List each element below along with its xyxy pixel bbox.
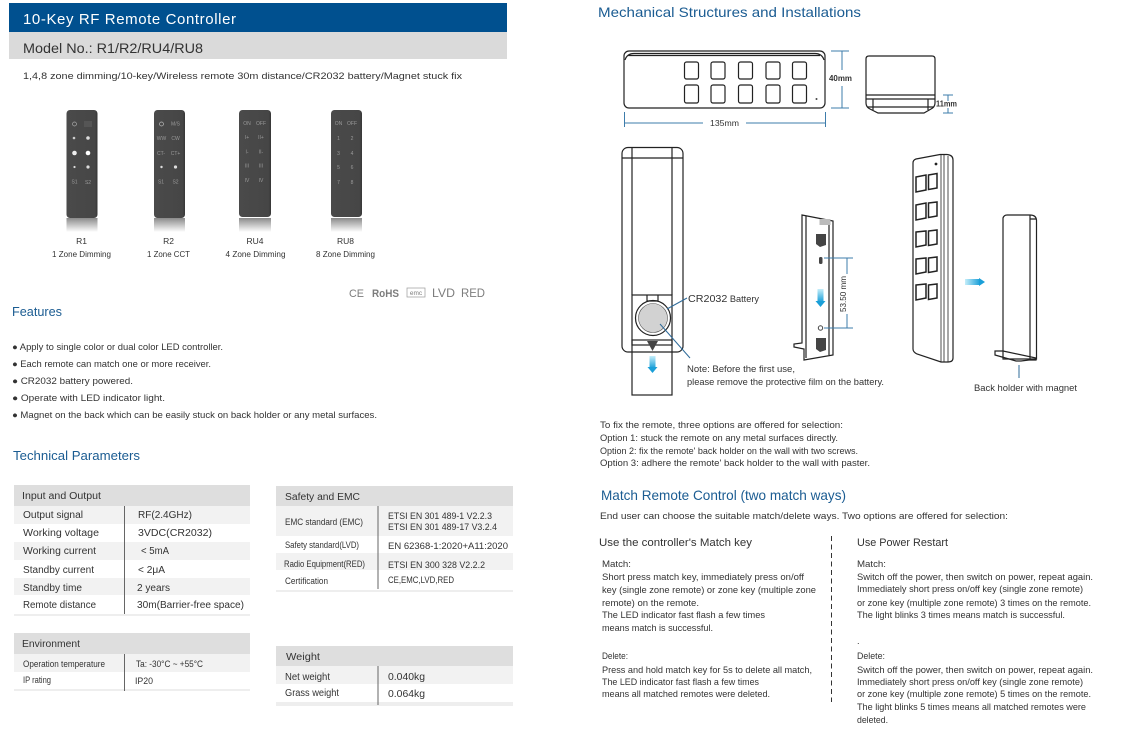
diagram: back holder with magnet: Back holder with magnet [974, 383, 1077, 393]
product: RU8 remote: 1 [337, 136, 340, 142]
table: Input and Output: 30m(Barrier-free space) [137, 600, 244, 611]
product: R2 remote: CW [171, 136, 180, 142]
product: RU4 remote: III [259, 164, 263, 170]
product: RU8 remote: ON [335, 121, 343, 127]
callout: protective film note [660, 324, 884, 387]
table: Safety and EMC: ETSI EN 301 489-17 V3.2.4 [388, 522, 497, 532]
table: Safety and EMC: EMC standard (EMC) [285, 517, 363, 527]
label: RU8: 8 Zone Dimming [316, 249, 375, 259]
product: RU4 remote: III [245, 164, 249, 170]
certification marks: emc [410, 290, 423, 297]
column: controller's match key: means match is successful. [602, 623, 713, 633]
label: R1: 1 Zone Dimming [52, 249, 111, 259]
column: power restart: Use Power Restart [857, 537, 948, 549]
label: RU4: 4 Zone Dimming [226, 249, 286, 259]
product: R2 remote: S1 [158, 180, 164, 186]
column: power restart: Delete: [857, 651, 885, 661]
product: R1 remote: S1 [71, 180, 78, 186]
heading: Features: Features [12, 304, 62, 319]
column: power restart: deleted. [857, 715, 888, 725]
product: RU8 remote: 4 [351, 151, 354, 157]
match intro: End user can choose the suitable match/delete ways. Two options are offered for selection: [600, 511, 1008, 521]
diagram: front view with dimensions [624, 51, 852, 128]
product: RU8 remote: 2 [351, 136, 354, 142]
certification marks: RED [461, 288, 485, 300]
table: Safety and EMC: Safety standard(LVD) [285, 540, 359, 550]
table: Safety and EMC: ETSI EN 300 328 V2.2.2 [388, 560, 485, 570]
label: R2: 1 Zone CCT [147, 249, 190, 259]
product: RU4 remote: OFF [256, 121, 266, 127]
table: Input and Output: Working current [23, 546, 96, 557]
heading: Match Remote Control: Match Remote Control (two match ways) [601, 487, 846, 503]
product: R1 remote [66, 110, 98, 232]
callout: CR2032 battery: CR2032 Battery [688, 293, 760, 305]
features list: ● Magnet on the back which can be easily stuck on back holder or any metal surfaces. [12, 410, 377, 420]
column: controller's match key: Press and hold match key for 5s to delete all match, [602, 665, 812, 675]
table: Input and Output: < 2μA [138, 565, 165, 576]
product: R2 remote [154, 110, 185, 232]
column: controller's match key: Use the controller's Match key [599, 537, 753, 549]
table: Input and Output: Standby time [23, 583, 82, 594]
table: Environment: Ta: -30°C ~ +55°C [136, 659, 203, 669]
diagram: remote in perspective [913, 154, 953, 362]
product: RU8 remote [331, 110, 362, 232]
table: Environment: Operation temperature [23, 659, 105, 669]
column: controller's match key: Match: [602, 559, 631, 569]
product: RU8 remote: 5 [337, 165, 340, 171]
product: RU4 remote: I+ [245, 135, 249, 141]
diagram: front view with dimensions: 40mm [829, 73, 852, 83]
table: Input and Output: Remote distance [23, 600, 96, 611]
table: Environment: Environment [22, 639, 80, 650]
diagram: back holder with screw spacing [794, 215, 853, 360]
callout: protective film note: please remove the protective film on the battery. [687, 377, 884, 387]
diagram: back holder with magnet [974, 215, 1077, 393]
table: Weight [276, 646, 513, 706]
diagram: battery compartment [622, 148, 683, 395]
table: Weight: 0.064kg [388, 689, 425, 700]
product: R1 remote: S2 [85, 180, 91, 186]
table: Safety and EMC [276, 486, 513, 592]
table: Safety and EMC: CE,EMC,LVD,RED [388, 575, 454, 585]
table: Weight: Grass weight [285, 688, 339, 699]
diagram: side view with dimensions: 11mm [936, 100, 957, 108]
table: Input and Output: 3VDC(CR2032) [138, 528, 212, 539]
table: Safety and EMC: Radio Equipment(RED) [284, 559, 365, 569]
table: Safety and EMC: ETSI EN 301 489-1 V2.2.3 [388, 511, 492, 521]
label: RU4: RU4 [246, 236, 264, 246]
table: Safety and EMC: EN 62368-1:2020+A11:2020 [388, 541, 508, 551]
product: RU4 remote: II- [259, 150, 264, 156]
model number bar: Model No.: R1/R2/RU4/RU8 [23, 40, 203, 56]
text block: fixing options: Option 3: adhere the remote' back holder to the wall with paster. [600, 458, 870, 468]
table: Input and Output: Input and Output [22, 491, 101, 502]
arrow: slide battery door down [648, 356, 658, 373]
label: R1 [52, 236, 111, 259]
product: RU4 remote: IV [245, 178, 250, 184]
callout: CR2032 battery [667, 293, 760, 309]
product: RU8 remote: 8 [351, 180, 354, 186]
product: RU4 remote: II+ [258, 135, 264, 141]
diagram: back holder with screw spacing: 53.50 mm [839, 276, 848, 312]
column: power restart: Switch off the power, then switch on power, repeat again. [857, 572, 1093, 582]
product: RU8 remote: 6 [351, 165, 354, 171]
table: Safety and EMC: Certification [285, 576, 328, 586]
column: controller's match key [599, 537, 816, 699]
table: Environment [14, 633, 250, 691]
product: R2 remote: WW [157, 136, 166, 142]
table: Input and Output: RF(2.4GHz) [138, 510, 192, 521]
label: RU4 [226, 236, 286, 259]
column: controller's match key: Short press match key, immediately press on/off [602, 572, 804, 582]
label: RU8: RU8 [337, 236, 354, 246]
column: controller's match key: remote) on the remote. [602, 598, 699, 608]
product: RU4 remote [239, 110, 271, 232]
features list [12, 342, 377, 420]
table: Weight: 0.040kg [388, 672, 425, 683]
certification marks: RoHS [372, 288, 399, 300]
certification marks [349, 288, 485, 300]
diagram: side view with dimensions [866, 56, 957, 113]
diagram: front view with dimensions: 135mm [710, 118, 739, 128]
product: RU4 remote: ON [243, 121, 251, 127]
column: power restart: The light blinks 5 times means all matched remotes were [857, 702, 1086, 712]
column: controller's match key: The LED indicator fast flash a few times [602, 610, 765, 620]
callout: protective film note: Note: Before the first use, [687, 364, 795, 374]
features list: ● Operate with LED indicator light. [12, 393, 165, 403]
label: R2: R2 [163, 236, 174, 246]
column: power restart: or zone key (multiple zone remote) 5 times on the remote. [857, 689, 1091, 699]
product: R2 remote: S2 [172, 180, 179, 186]
table: Input and Output [14, 485, 250, 616]
title banner [9, 3, 507, 32]
column: power restart: The light blinks 3 times means match is successful. [857, 610, 1065, 620]
table: Safety and EMC: Safety and EMC [285, 492, 360, 503]
text block: fixing options: Option 1: stuck the remote on any metal surfaces directly. [600, 433, 838, 443]
column: power restart [857, 537, 1093, 725]
table: Environment: IP rating [23, 675, 51, 685]
product: RU4 remote: IV [259, 178, 264, 184]
column: power restart: or zone key (multiple zone remote) 3 times on the remote. [857, 598, 1091, 608]
text block: fixing options: To fix the remote, three options are offered for selection: [600, 420, 843, 430]
text block: fixing options [600, 420, 870, 468]
product: R2 remote: M/S [171, 122, 181, 128]
product: R2 remote: CT+ [171, 151, 180, 157]
heading: Mechanical Structures and Installations: Mechanical Structures and Installations [598, 4, 861, 20]
certification marks: LVD [432, 288, 455, 300]
product: RU8 remote: 7 [337, 180, 340, 186]
label: RU8 [316, 236, 375, 259]
product summary: 1,4,8 zone dimming/10-key/Wireless remote 30m distance/CR2032 battery/Magnet stuck fix [23, 71, 462, 81]
features list: ● Each remote can match one or more receiver. [12, 359, 211, 369]
table: Input and Output: < 5mA [141, 546, 169, 557]
column: controller's match key: means all matched remotes were deleted. [602, 689, 770, 699]
column: controller's match key: key (single zone remote) or zone key (multiple zone [602, 585, 816, 595]
column: controller's match key: The LED indicator fast flash a few times [602, 677, 759, 687]
label: R2 [147, 236, 190, 259]
product: RU8 remote: OFF [347, 121, 357, 127]
label: R1: R1 [76, 236, 87, 246]
features list: ● CR2032 battery powered. [12, 376, 133, 386]
title banner: 10-Key RF Remote Controller [23, 11, 236, 28]
product: R2 remote: CT- [157, 151, 165, 157]
column: controller's match key: Delete: [602, 651, 628, 661]
table: Input and Output: Working voltage [23, 528, 99, 539]
table: Weight: Net weight [285, 672, 330, 683]
table: Environment: IP20 [135, 676, 153, 686]
product: RU8 remote: 3 [337, 151, 340, 157]
column: power restart: Immediately short press on/off key (single zone remote) [857, 677, 1083, 687]
column: power restart: . [857, 636, 860, 646]
model number bar [9, 32, 507, 59]
certification marks: CE [349, 288, 364, 300]
table: Input and Output: 2 years [137, 583, 170, 594]
column: power restart: Immediately short press on/off key (single zone remote) [857, 584, 1083, 594]
heading: Technical Parameters: Technical Parameters [13, 448, 141, 463]
table: Input and Output: Standby current [23, 565, 94, 576]
table: Input and Output: Output signal [23, 510, 83, 521]
arrow: attach to holder [965, 278, 985, 286]
column: power restart: Match: [857, 559, 886, 569]
text block: fixing options: Option 2: fix the remote' back holder on the wall with two screws. [600, 446, 858, 456]
column: power restart: Switch off the power, then switch on power, repeat again. [857, 665, 1093, 675]
table: Weight: Weight [286, 652, 320, 663]
features list: ● Apply to single color or dual color LED controller. [12, 342, 223, 352]
product: RU4 remote: I- [245, 150, 249, 156]
